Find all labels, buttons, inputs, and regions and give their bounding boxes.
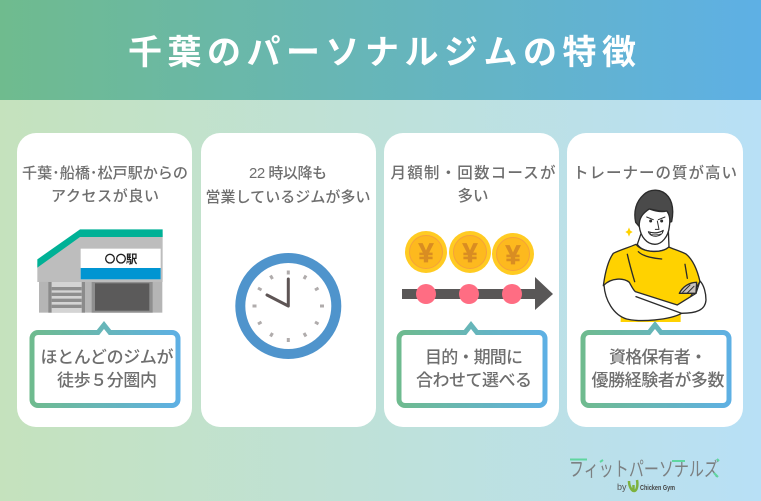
panel: station access (17, 133, 192, 427)
panel heading: payment plans (390, 163, 556, 205)
callout: qualified trainers (583, 325, 729, 406)
callout: qualified trainers: 資格保有者・ (609, 348, 707, 367)
icon: yen coins (405, 231, 534, 275)
panel: late hours (201, 133, 376, 427)
callout: choose by goal (399, 325, 545, 406)
callout: qualified trainers: 優勝経験者が多数 (592, 370, 724, 390)
panel heading: payment plans: 月額制・回数コースが (390, 163, 556, 182)
panel heading: payment plans: 多い (458, 187, 488, 205)
coin 2: ¥ (462, 238, 478, 268)
callout: five minutes walk: ほとんどのジムが (40, 347, 174, 367)
panel heading: station access: アクセスが良い (51, 187, 159, 205)
panel heading: late hours: 22 時以降も (249, 165, 327, 182)
panel heading: station access (22, 165, 188, 205)
panel: trainers (567, 133, 743, 427)
header band (0, 0, 761, 100)
callout: five minutes walk: 徒歩５分圏内 (57, 371, 157, 390)
icon: trainer with crossed arms (603, 190, 706, 322)
callout: choose by goal: 目的・期間に (425, 348, 523, 367)
callout: choose by goal: 合わせて選べる (416, 371, 532, 390)
icon: station building (37, 229, 163, 313)
logo: Chicken Gym (640, 485, 675, 492)
coin 3: ¥ (505, 240, 521, 270)
panel heading: trainers: トレーナーの質が高い (573, 163, 737, 182)
title: 千葉のパーソナルジムの特徴 (128, 34, 636, 72)
icon: clock (240, 258, 336, 354)
panel heading: late hours: 営業しているジムが多い (206, 188, 370, 206)
coin 1: ¥ (418, 238, 434, 268)
panel heading: station access: 千葉･船橋･松戸駅からの (22, 165, 188, 182)
panel: payment plans (384, 133, 559, 427)
logo: by (617, 482, 627, 492)
callout: five minutes walk (32, 325, 178, 406)
arrow: timeline (402, 277, 553, 310)
icon: station building: 駅 (126, 253, 138, 266)
logo (569, 458, 719, 492)
panel heading: late hours (206, 165, 370, 206)
